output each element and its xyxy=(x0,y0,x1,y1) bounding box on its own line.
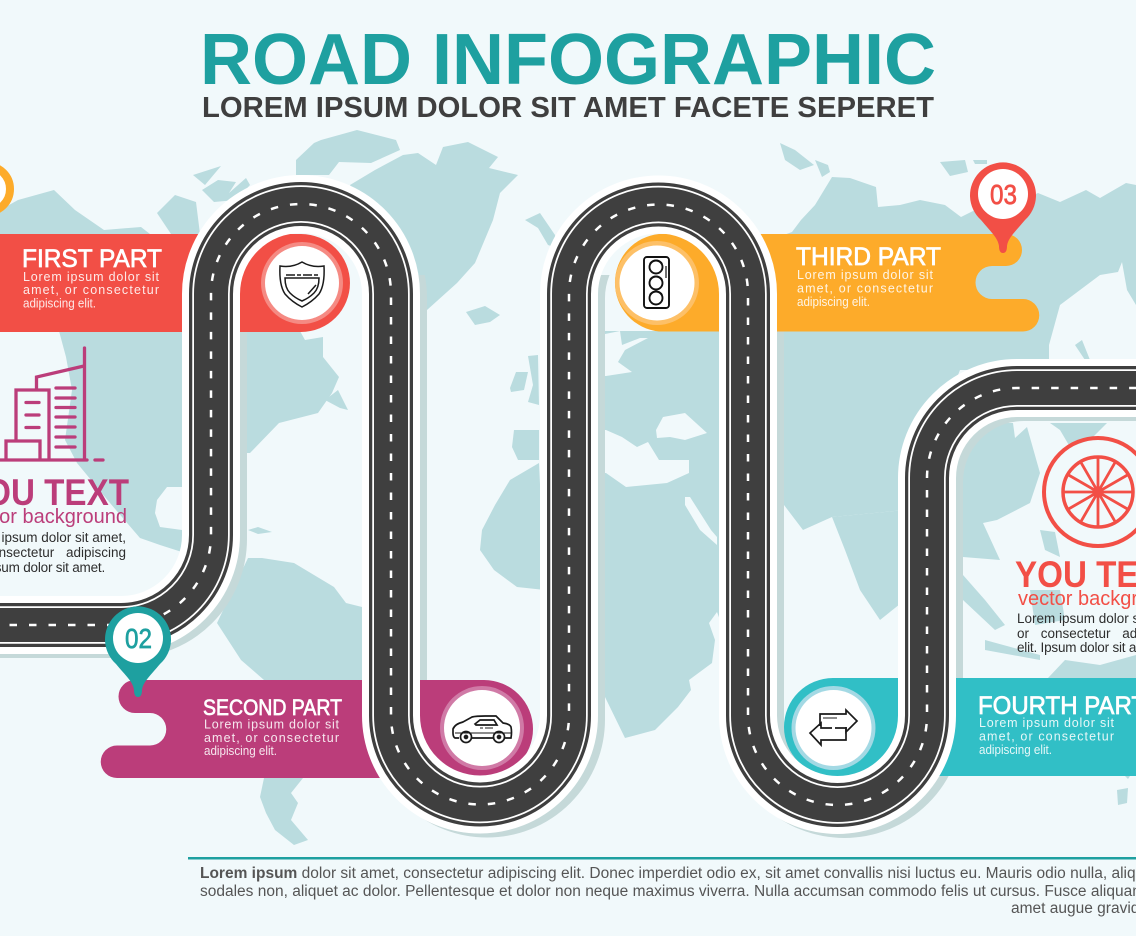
first part text: FIRST PART xyxy=(22,245,162,273)
pin: 03: 03 xyxy=(990,179,1017,210)
pin: 02: 02 xyxy=(125,623,152,654)
third part text: amet, or consectetur xyxy=(797,282,933,296)
road shadow xyxy=(0,208,1136,809)
third part text: THIRD PART xyxy=(796,243,941,271)
footer rule and paragraph: sodales non, aliquet ac dolor. Pellentesque et dolor non neque maximus viverra. Nulla accumsan commodo felis ut cursus. Fusce aliquam xyxy=(200,883,1136,900)
first part text: amet, or consectetur xyxy=(23,283,159,297)
subtitle: LOREM IPSUM DOLOR SIT AMET FACETE SEPERET xyxy=(202,92,935,124)
pin: 03 xyxy=(970,162,1036,253)
icon: car xyxy=(440,686,524,770)
fourth part text: amet, or consectetur xyxy=(979,730,1114,744)
panel: fourth part band xyxy=(784,678,1136,776)
first part text: Lorem ipsum dolor sit xyxy=(23,270,160,284)
building icon xyxy=(0,348,103,460)
third part text: adipiscing elit. xyxy=(797,295,870,309)
second part text: SECOND PART xyxy=(203,695,342,720)
third part text: Lorem ipsum dolor sit xyxy=(797,268,934,282)
second part text: adipiscing elit. xyxy=(204,744,277,758)
fourth part text xyxy=(978,692,1136,757)
title: ROAD INFOGRAPHIC xyxy=(200,20,936,100)
icon: arrows xyxy=(792,686,876,770)
second part text: Lorem ipsum dolor sit xyxy=(204,718,340,732)
second part text: amet, or consectetur xyxy=(204,731,339,745)
world map background xyxy=(0,130,1136,845)
panel: third part band xyxy=(615,234,1039,332)
first part text: adipiscing elit. xyxy=(23,296,96,310)
winding road xyxy=(0,204,1136,805)
panel: second part band xyxy=(101,680,533,778)
panel: first part band xyxy=(0,234,350,332)
icon: wheel xyxy=(1044,438,1136,546)
left text block xyxy=(0,472,129,575)
first part text xyxy=(22,245,162,310)
right text block xyxy=(1015,554,1136,655)
icon: shield xyxy=(261,242,343,324)
pin: 02 xyxy=(105,606,171,697)
pin: 01 xyxy=(0,166,10,212)
icon: traffic light xyxy=(615,241,699,325)
footer rule and paragraph xyxy=(188,857,1136,917)
fourth part text: Lorem ipsum dolor sit xyxy=(979,716,1115,730)
fourth part text: adipiscing elit. xyxy=(979,743,1052,757)
third part text xyxy=(796,243,941,309)
second part text xyxy=(203,695,342,758)
